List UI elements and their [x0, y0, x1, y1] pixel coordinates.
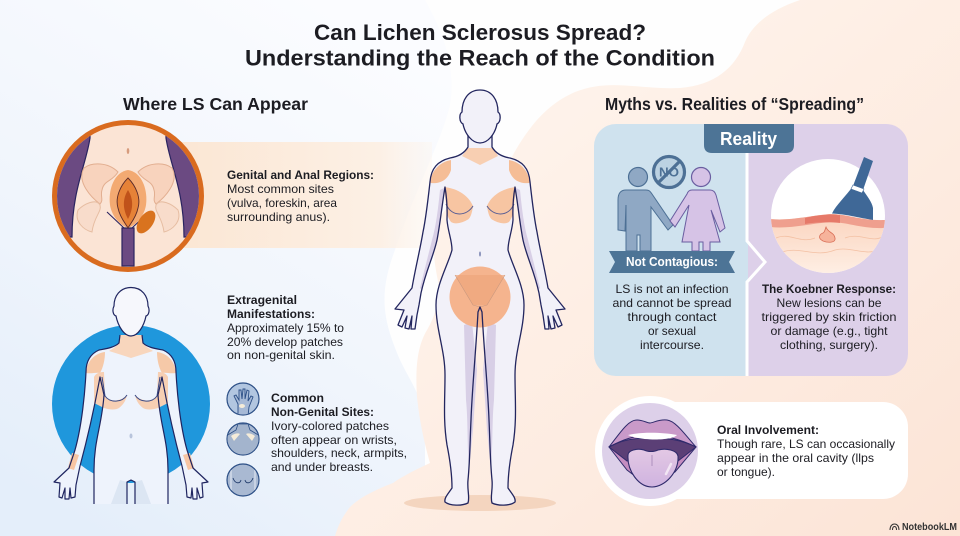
- icon: couple holding hands: [618, 156, 725, 251]
- title: Can Lichen Sclerosus Spread?: [314, 20, 646, 45]
- title: Understanding the Reach of the Condition: [245, 46, 715, 70]
- text: oral involvement: appear in the oral cavity (llps: [717, 451, 874, 465]
- text: not contagious body: intercourse.: [640, 338, 704, 352]
- callout band: genital region: [170, 142, 432, 248]
- central body figure: [395, 90, 565, 511]
- text: koebner response: [762, 282, 896, 352]
- text: koebner response: clothing, surgery).: [780, 338, 878, 352]
- heading: where LS can appear: Where LS Can Appear: [123, 94, 308, 114]
- text: extragenital manifestations: Extragenital: [227, 293, 297, 307]
- text: extragenital manifestations: on non-genital skin.: [227, 348, 335, 362]
- text: common non-genital sites: often appear on wrists,: [271, 433, 397, 447]
- icon: shoulders site: [226, 423, 260, 455]
- text: not contagious body: or sexual: [648, 324, 696, 338]
- text: koebner response: triggered by skin friction: [762, 310, 896, 324]
- text: not contagious body: [612, 282, 732, 352]
- tab: reality: [704, 124, 794, 153]
- icon: lips and tongue: [602, 403, 698, 499]
- text: common non-genital sites: and under breasts.: [271, 460, 373, 474]
- icon: pelvis circle: [52, 120, 204, 272]
- panel: reality: [594, 124, 908, 376]
- text: common non-genital sites: Non-Genital Sites:: [271, 405, 374, 419]
- text: not contagious body: and cannot be spread: [612, 296, 732, 310]
- panel: oral involvement: [595, 396, 908, 506]
- text: genital and anal regions: [227, 168, 374, 224]
- icon: under breast site: [227, 464, 259, 496]
- text: extragenital manifestations: Approximately 15% to: [227, 321, 344, 335]
- text: extragenital manifestations: Manifestations:: [227, 307, 315, 321]
- icon: hand site: [227, 383, 259, 416]
- text: common non-genital sites: [271, 391, 407, 474]
- text: koebner response: The Koebner Response:: [762, 282, 896, 296]
- title: [245, 20, 715, 70]
- text: oral involvement: Though rare, LS can occasionally: [717, 437, 895, 451]
- heading: myths vs realities: Myths vs. Realities of “Spreading”: [605, 94, 864, 114]
- text: not contagious body: through contact: [628, 310, 717, 324]
- figure: torso with patches: [52, 288, 210, 504]
- text: common non-genital sites: Common: [271, 391, 324, 405]
- icon: skin friction: [770, 157, 886, 276]
- text: oral involvement: Oral Involvement:: [717, 423, 819, 437]
- text: extragenital manifestations: [227, 293, 344, 362]
- text: oral involvement: [717, 423, 895, 479]
- text: genital and anal regions: Genital and Anal Regions:: [227, 168, 374, 182]
- text: common non-genital sites: Ivory-colored patches: [271, 419, 389, 433]
- text: extragenital manifestations: 20% develop patches: [227, 335, 343, 349]
- text: genital and anal regions: surrounding anus).: [227, 210, 330, 224]
- text: common non-genital sites: shoulders, neck, armpits,: [271, 446, 407, 460]
- text: not contagious body: LS is not an infection: [616, 282, 728, 296]
- text: oral involvement: or tongue).: [717, 465, 775, 479]
- ribbon: not contagious: [609, 251, 735, 273]
- text: koebner response: or damage (e.g., tight: [770, 324, 888, 338]
- icon: couple holding hands: NO: [659, 164, 679, 180]
- text: koebner response: New lesions can be: [776, 296, 882, 310]
- text: genital and anal regions: (vulva, foreskin, area: [227, 196, 337, 210]
- text: genital and anal regions: Most common sites: [227, 182, 334, 196]
- tab: reality: Reality: [720, 129, 777, 149]
- ribbon: not contagious: Not Contagious:: [626, 255, 718, 269]
